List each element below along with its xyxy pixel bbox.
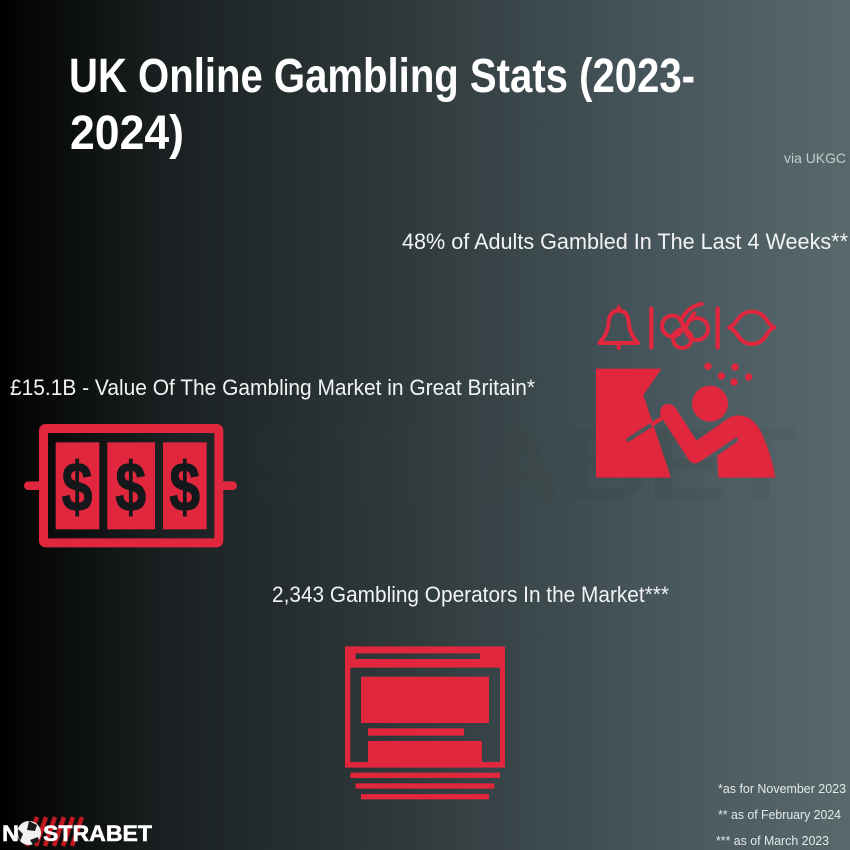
icon: footer lines [350,773,500,799]
watermark: NOSTRABET: STRABET [243,407,797,522]
icon: side handles [28,473,233,499]
icon: lemon [729,312,774,344]
footnotes: *as for November 2023 [718,781,846,796]
icon: page line [368,728,464,736]
icon: slot machine body [596,369,671,478]
icon: bell [599,307,638,348]
icon: arm [660,404,738,463]
title: UK Online Gambling Stats (2023- [69,50,695,103]
stat heading: market value: £15.1B - Value Of The Gambling Market in Great Britain* [10,375,535,400]
footnotes [716,781,846,848]
title [69,50,695,160]
logo stripes [27,817,82,846]
icon: website page [345,646,505,799]
icon: gambler at slot machine [596,304,775,478]
icon: page banner [361,677,489,723]
logo wordmark: STRABET [43,821,153,846]
icon: dizzy dots [704,363,752,386]
logo wordmark [2,821,153,846]
footnotes: ** as of February 2024 [718,807,841,822]
stat heading: operators: 2,343 Gambling Operators In the Market*** [272,582,669,607]
icon: separators [651,309,718,347]
icon: slot reels with dollar signs [28,428,233,543]
icon: reels [56,442,207,529]
title: 2024) [70,107,184,160]
icon: head [692,386,728,422]
icon: cherries [662,304,708,348]
icon: frame [43,428,219,543]
logo: Nostrabet [2,817,153,846]
icon: dollar signs: $ [115,449,146,526]
icon: browser window [345,646,505,768]
logo football [17,821,41,845]
icon: lever [628,418,662,440]
icon: dollar signs: $ [62,449,92,526]
footnotes: *** as of March 2023 [716,833,829,848]
icon: dollar signs [62,449,200,526]
source note: via UKGC [784,150,846,166]
icon: dollar signs: $ [169,449,200,526]
icon: torso [717,415,775,478]
stat heading: adults gambled: 48% of Adults Gambled In The Last 4 Weeks** [402,229,848,254]
logo wordmark: N [2,821,19,846]
